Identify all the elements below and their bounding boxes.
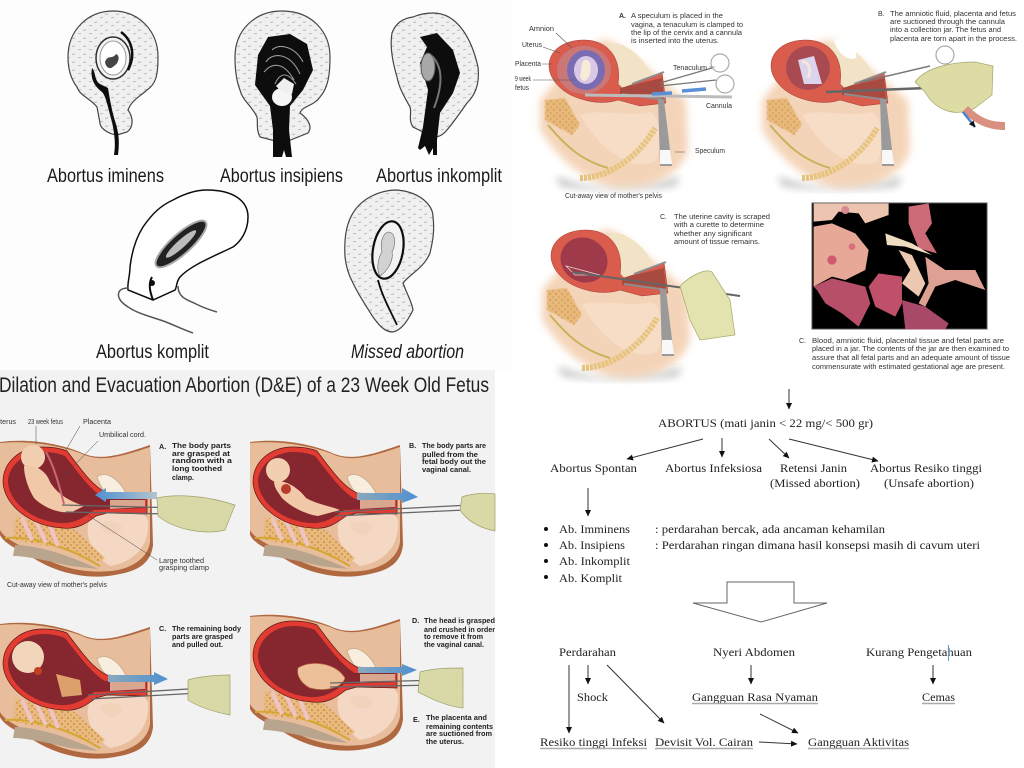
- icon: abortus insipiens uterus: [235, 11, 330, 157]
- step A text: A.: [159, 442, 166, 451]
- step D text: assure that all fetal parts and an adequate amount of tissue: [812, 355, 1010, 362]
- labels for illustration A: Placenta: [83, 419, 111, 426]
- step B text: B.: [878, 11, 885, 18]
- step C text: The uterine cavity is scraped: [674, 214, 770, 221]
- step A text: is inserted into the uterus.: [631, 38, 719, 45]
- photo: removed tissue: [812, 203, 987, 329]
- bulleted list: Ab. Imminens: [559, 522, 630, 536]
- anatomy labels for illustration A: Tenaculum: [673, 65, 707, 72]
- abortion types: Abortus Infeksiosa: [665, 461, 763, 475]
- icon: abortus komplit uterus: [118, 190, 248, 333]
- abortion types: (Missed abortion): [770, 476, 860, 490]
- labels for illustration A: Large toothed: [159, 558, 204, 565]
- labels for illustration A: Umbilical cord.: [99, 432, 146, 439]
- bulleted list: Ab. Komplit: [559, 571, 623, 585]
- anatomy labels for illustration A: fetus: [515, 85, 529, 92]
- title: Dilation and Evacuation Abortion (D&E) of a 23 Week Old Fetus: [0, 374, 489, 397]
- step B text: placenta are torn apart in the process.: [890, 36, 1017, 43]
- panel: suction procedure illustrations: [515, 11, 1017, 380]
- abortion types: [550, 461, 983, 490]
- step A text: A.: [619, 13, 626, 20]
- bulleted list: [544, 522, 981, 585]
- step D text: The head is grasped: [424, 616, 495, 625]
- diagnoses bottom row: Devisit Vol. Cairan: [655, 735, 753, 749]
- problems row: [559, 645, 972, 661]
- step D text: to remove it from: [424, 632, 483, 641]
- abortion types: Abortus Resiko tinggi: [870, 461, 983, 475]
- anatomy labels for illustration A: Speculum: [695, 148, 725, 155]
- problems row: Kurang Pengetahuan: [866, 645, 972, 659]
- caption: cut-away view: Cut-away view of mother's pelvis: [565, 193, 662, 200]
- step A text: the lip of the cervix and a cannula: [631, 30, 742, 37]
- step D text: [412, 616, 495, 649]
- bulleted list: Ab. Insipiens: [559, 538, 625, 552]
- step D text: Blood, amniotic fluid, placental tissue and fetal parts are: [812, 338, 1004, 345]
- anatomy labels for illustration A: 9 week: [515, 76, 531, 83]
- block down arrow: [693, 582, 827, 622]
- step D text: placed in a jar. The contents of the jar are then examined to: [812, 346, 1009, 353]
- step B text: The body parts are: [422, 441, 486, 450]
- step A text: random with a: [172, 456, 233, 465]
- diagnoses middle row: Cemas: [922, 690, 955, 704]
- problems row: Nyeri Abdomen: [713, 645, 795, 659]
- icon: abortus inkomplit uterus: [391, 13, 478, 155]
- caption: Abortus inkomplit: Abortus inkomplit: [376, 166, 503, 187]
- icon: gloved hand, tube and arrow in B: [915, 46, 1005, 130]
- diagnoses middle row: [577, 690, 955, 704]
- step D text: D.: [412, 616, 419, 625]
- step D text: and crushed in order: [424, 625, 495, 634]
- panel: stages of abortion diagrams: [0, 0, 512, 370]
- step B text: vaginal canal.: [422, 465, 471, 474]
- step C text: parts are grasped: [172, 632, 233, 641]
- step A text: The body parts: [172, 441, 231, 450]
- anatomy labels for illustration A: Placenta: [515, 61, 541, 68]
- anatomy labels for illustration A: Uterus: [522, 42, 542, 49]
- step B text: into a collection jar. The fetus and: [890, 27, 1001, 34]
- labels for illustration A: 23 week fetus: [28, 419, 63, 426]
- labels for illustration A: Cut-away view of mother's pelvis: [7, 582, 107, 589]
- step B text: pulled from the: [422, 450, 478, 459]
- anatomy labels for illustration A: Cannula: [706, 103, 732, 110]
- step C text: whether any significant: [673, 231, 752, 238]
- arrow to spontaneous list: [587, 488, 589, 516]
- step C text: C.: [660, 214, 667, 221]
- heading: ABORTUS: ABORTUS (mati janin < 22 mg/< 500 gr): [658, 416, 873, 430]
- step B text: [409, 441, 486, 474]
- caption: Abortus komplit: Abortus komplit: [96, 342, 210, 363]
- bulleted list: : Perdarahan ringan dimana hasil konsepsi masih di cavum uteri: [655, 538, 981, 552]
- anatomy labels for illustration A: Amnion: [529, 26, 554, 33]
- step A text: long toothed: [172, 464, 222, 473]
- caption: Missed abortion: Missed abortion: [351, 342, 464, 363]
- step C text: The remaining body: [172, 624, 241, 633]
- step E text: are suctioned from: [426, 729, 492, 738]
- step E text: remaining contents: [426, 722, 493, 731]
- step D text: C.: [799, 338, 806, 345]
- step D text: [799, 338, 1010, 371]
- problems row: Perdarahan: [559, 645, 616, 659]
- step A text: [619, 13, 743, 45]
- icon: missed abortion uterus: [345, 190, 434, 332]
- panel: dilation and evacuation: [0, 370, 495, 768]
- step E text: [413, 713, 493, 746]
- step B text: [878, 11, 1017, 43]
- step C text: amount of tissue remains.: [674, 239, 760, 246]
- step D text: the vaginal canal.: [424, 640, 484, 649]
- illustration B: suction through the cannula: [762, 39, 930, 190]
- illustration D: head grasped: [250, 615, 463, 751]
- diagnoses bottom row: Resiko tinggi Infeksi: [540, 735, 648, 749]
- abortion types: Retensi Janin: [780, 461, 847, 475]
- step C text: [660, 214, 770, 246]
- illustration A: grasping clamp: [0, 426, 235, 577]
- arrows from ABORTUS to types: [627, 389, 878, 461]
- diagnoses bottom row: Gangguan Aktivitas: [808, 735, 909, 749]
- step E text: E.: [413, 715, 420, 724]
- step C text: C.: [159, 624, 166, 633]
- step A text: clamp.: [172, 473, 194, 482]
- step B text: are suctioned through the cannula: [890, 19, 1005, 26]
- diagnoses bottom row: [540, 735, 909, 749]
- step C text: [159, 624, 241, 649]
- diagnoses middle row: Gangguan Rasa Nyaman: [692, 690, 818, 704]
- step C text: and pulled out.: [172, 640, 223, 649]
- caption: Abortus iminens: Abortus iminens: [47, 166, 164, 187]
- step E text: the uterus.: [426, 737, 464, 746]
- step C text: with a curette to determine: [673, 222, 764, 229]
- panel: flow chart of abortus: [540, 389, 983, 749]
- illustration C: remaining parts: [0, 623, 230, 759]
- icon: abortus iminens uterus: [68, 11, 158, 155]
- arrows from problems to diagnoses: [569, 665, 933, 744]
- bulleted list: Ab. Inkomplit: [559, 554, 631, 568]
- step D text: commensurate with estimated gestational age are present.: [812, 364, 1005, 371]
- labels for illustration A: [0, 419, 209, 589]
- step A text: A speculum is placed in the: [631, 13, 723, 20]
- diagnoses middle row: Shock: [577, 690, 608, 704]
- illustration C: curette scraping: [542, 229, 740, 380]
- labels for illustration A: grasping clamp: [159, 565, 209, 572]
- step A text: [159, 441, 233, 482]
- bulleted list: : perdarahan bercak, ada ancaman kehamilan: [655, 522, 885, 536]
- step A text: are grasped at: [172, 449, 231, 458]
- abortion types: Abortus Spontan: [550, 461, 637, 475]
- illustration B: parts pulled out: [250, 441, 495, 577]
- step A text: vagina, a tenaculum is clamped to: [631, 22, 743, 29]
- step E text: The placenta and: [426, 713, 487, 722]
- illustration A: speculum and cannula: [540, 40, 734, 190]
- step B text: The amniotic fluid, placenta and fetus: [890, 11, 1017, 18]
- caption: Abortus insipiens: Abortus insipiens: [220, 166, 343, 187]
- step B text: fetal body out the: [422, 457, 486, 466]
- abortion types: (Unsafe abortion): [884, 476, 974, 490]
- anatomy labels for illustration A: [515, 26, 732, 155]
- step B text: B.: [409, 441, 416, 450]
